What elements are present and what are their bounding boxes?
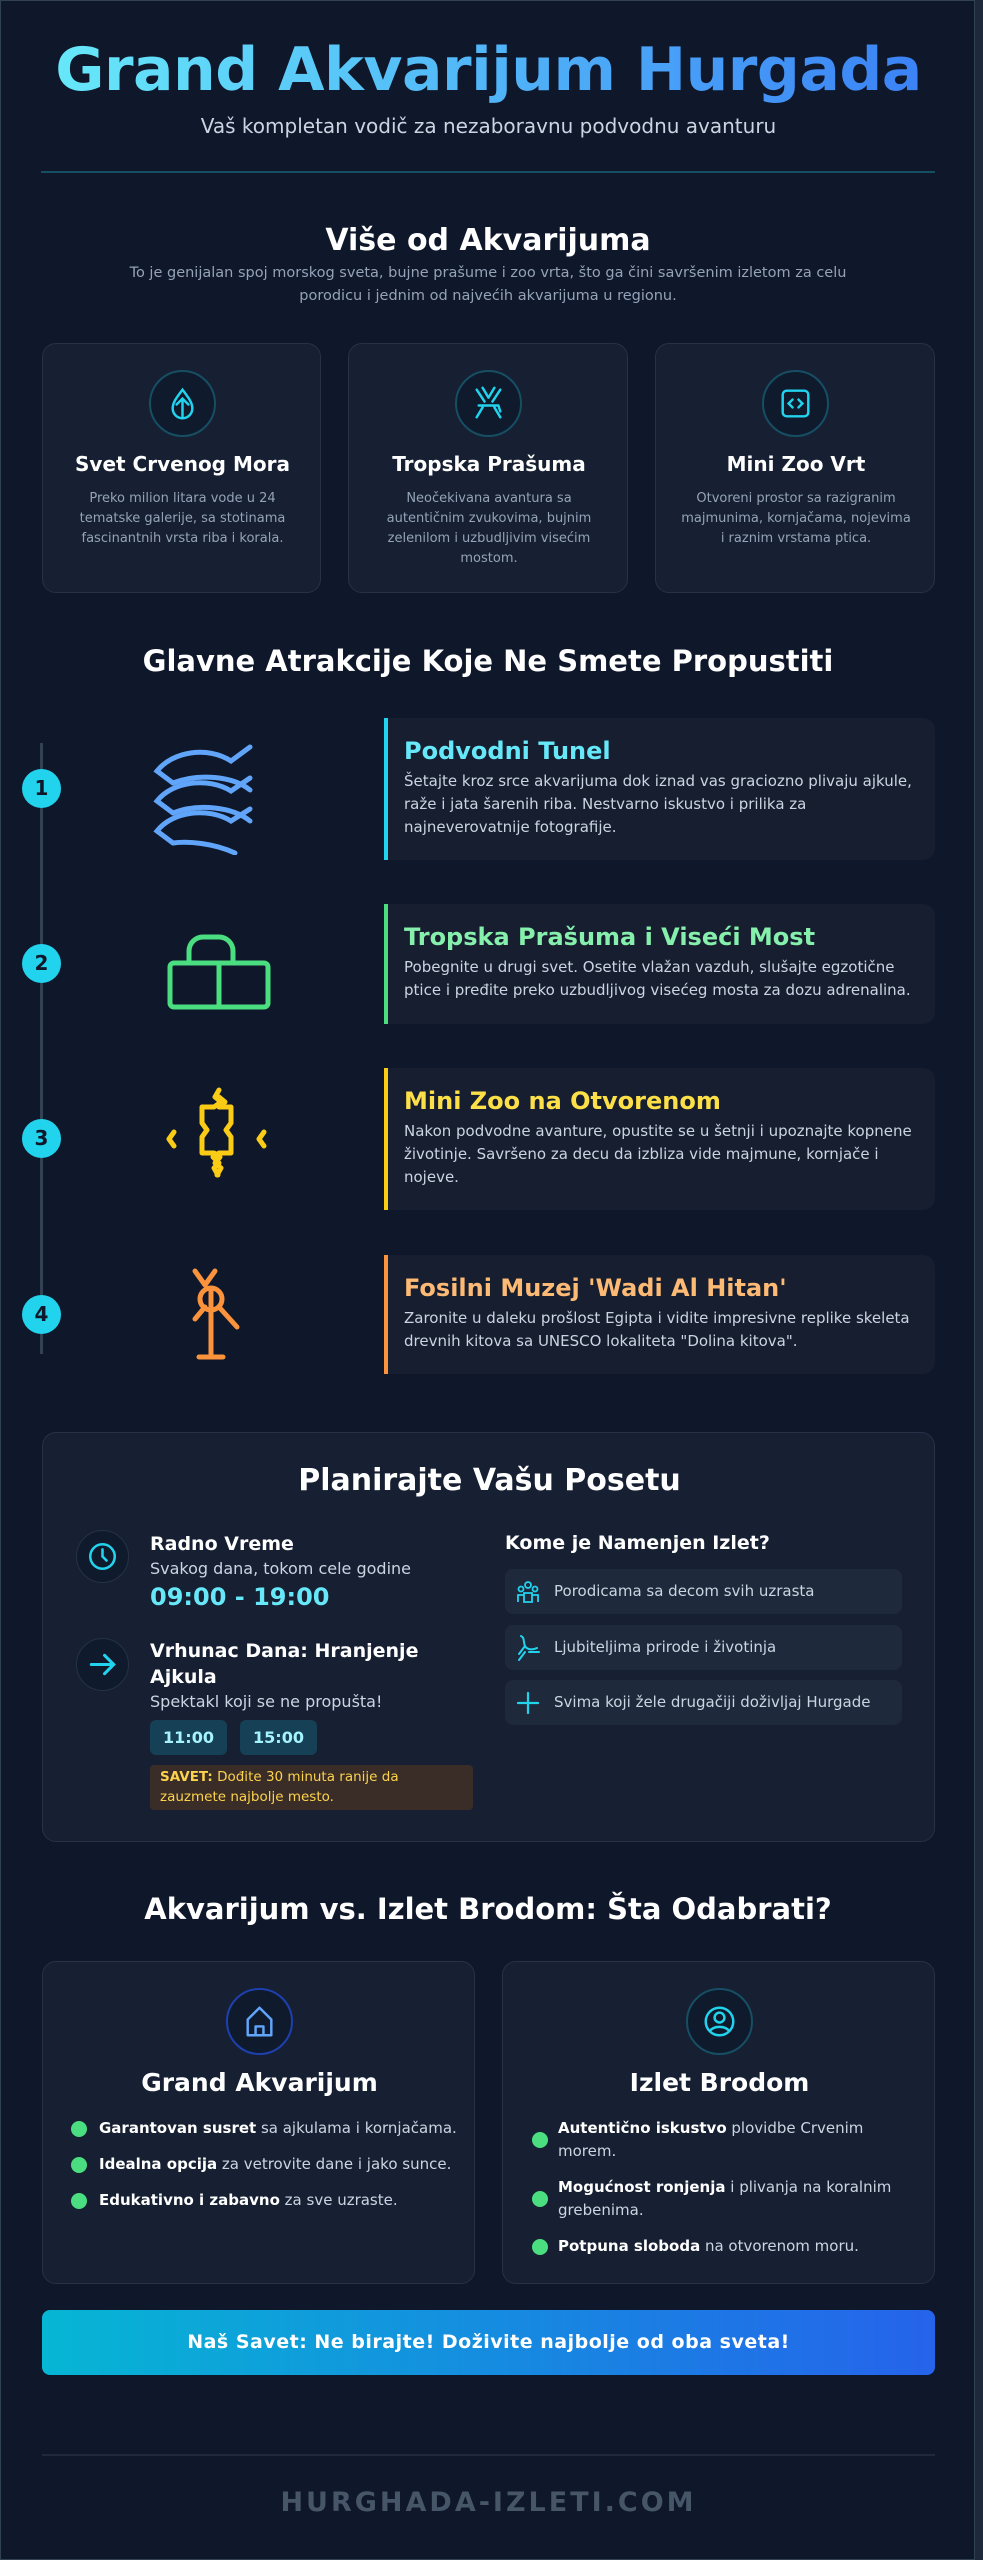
attraction 2: Pobegnite u drugi svet. Osetite vlažan vazduh, slušajte egzotične ptice i pređite preko uzbudljivog visećeg mosta za dozu adrenalina. [404,958,911,999]
panel: svet crvenog mora: Preko milion litara vode u 24 tematske galerije, sa stotinama fascinantnih vrsta riba i korala. [80,491,285,546]
audience item 1 [505,1569,902,1614]
heading: vs: Akvarijum vs. Izlet Brodom: Šta Odabrati? [144,1892,832,1926]
panel: tropska prasuma [348,343,628,593]
panel: grand akvarijum [42,1961,475,2284]
benefit list: Edukativno i zabavno za sve uzraste. [99,2191,398,2209]
panel: mini zoo vrt: Otvoreni prostor sa razigranim majmunima, kornjačama, nojevima i raznim vrstama ptica. [681,491,911,546]
attraction 4 [384,1255,935,1374]
icon: fossil [192,1268,240,1360]
icon: jungle [455,370,522,437]
panel: planirajte posetu: 15:00 [253,1728,304,1747]
number 1: 1 [35,776,48,800]
feeding: Vrhunac Dana: Hranjenje Ajkula [150,1640,418,1688]
attraction 3: Nakon podvodne avanture, opustite se u šetnji i upoznajte kopnene životinje. Savršeno za decu da izbliza vide majmune, kornjače i nojeve. [404,1122,912,1186]
working hours [150,1533,411,1611]
benefit list: Mogućnost ronjenja i plivanja na koralnim grebenima. [558,2178,891,2219]
audience item 2 [505,1625,902,1670]
tip box: SAVET: Dođite 30 minuta ranije da zauzmete najbolje mesto. [160,1769,399,1805]
icon: user [686,1988,753,2055]
panel: izlet brodom: Izlet Brodom [630,2068,809,2097]
feeding: Spektakl koji se ne propušta! [150,1692,382,1711]
number 1 [22,769,61,808]
attraction 3 [384,1068,935,1210]
callout banner [42,2310,935,2375]
panel: svet crvenog mora [42,343,321,593]
panel: planirajte posetu [42,1432,935,1842]
subtitle: Vaš kompletan vodič za nezaboravnu podvodnu avanturu [201,114,776,138]
icon: clock [76,1530,129,1583]
attraction 2 [384,904,935,1024]
attraction 2: Tropska Prašuma i Viseći Most [404,923,815,951]
icon: house [226,1988,293,2055]
benefit list: Garantovan susret sa ajkulama i kornjačama. [99,2119,457,2137]
audience item 3 [505,1680,902,1725]
number 4 [22,1295,61,1334]
tip box [150,1765,473,1810]
number 4: 4 [35,1302,48,1326]
number 3 [22,1119,61,1158]
heading: kome je namenjen: Kome je Namenjen Izlet? [505,1532,770,1554]
attraction 1: Podvodni Tunel [404,737,611,765]
attraction 4: Zaronite u daleku prošlost Egipta i vidite impresivne replike skeleta drevnih kitova sa UNESCO lokaliteta "Dolina kitova". [404,1309,910,1350]
panel: mini zoo vrt [655,343,935,593]
time chips [150,1720,227,1755]
icon: arrow [76,1638,129,1691]
heading: glavne atrakcije: Glavne Atrakcije Koje Ne Smete Propustiti [143,644,833,678]
benefit list [532,2119,891,2255]
attraction 1 [384,718,935,860]
audience item 3: Svima koji žele drugačiji doživljaj Hurgade [554,1693,870,1711]
intro text: To je genijalan spoj morskog sveta, bujne prašume i zoo vrta, što ga čini savršenim izletom za celu porodicu i jednim od najvećih akvarijuma u regionu. [130,265,846,304]
audience item 1: Porodicama sa decom svih uzrasta [554,1582,814,1600]
benefit list [71,2119,457,2209]
icon: drop [149,370,216,437]
number 3: 3 [35,1126,48,1150]
attraction 4: Fosilni Muzej 'Wadi Al Hitan' [404,1274,787,1302]
time chips: 11:00 [163,1728,214,1747]
panel: mini zoo vrt: Mini Zoo Vrt [727,452,865,476]
attraction 3: Mini Zoo na Otvorenom [404,1087,721,1115]
icon: code box [762,370,829,437]
icon: zoo [166,1088,266,1178]
footer: HURGHADA-IZLETI.COM [280,2487,697,2518]
panel: tropska prasuma: Tropska Prašuma [392,452,586,476]
number 2: 2 [35,951,48,975]
panel: tropska prasuma: Neočekivana avantura sa autentičnim zvukovima, bujnim zelenilom i uzbudljivim visećim mostom. [387,491,591,566]
icon: waves [154,744,252,855]
working hours: Radno Vreme [150,1533,294,1555]
benefit list: Autentično iskustvo plovidbe Crvenim morem. [558,2119,863,2160]
panel: svet crvenog mora: Svet Crvenog Mora [75,452,290,476]
title: Grand Akvarijum Hurgada [55,35,922,105]
panel: izlet brodom [502,1961,935,2284]
working hours: Svakog dana, tokom cele godine [150,1559,411,1578]
callout banner: Naš Savet: Ne birajte! Doživite najbolje od oba sveta! [187,2331,790,2353]
heading: vise od akvarijuma: Više od Akvarijuma [325,223,651,258]
panel: grand akvarijum: Grand Akvarijum [141,2068,378,2097]
feeding [150,1640,418,1711]
audience item 2: Ljubiteljima prirode i životinja [554,1638,776,1656]
working hours: 09:00 - 19:00 [150,1583,329,1611]
heading: Planirajte Vašu Posetu [298,1463,681,1498]
number 2 [22,944,61,983]
benefit list: Idealna opcija za vetrovite dane i jako sunce. [99,2155,451,2173]
benefit list: Potpuna sloboda na otvorenom moru. [558,2237,859,2255]
icon: bridge [168,934,270,1010]
attraction 1: Šetajte kroz srce akvarijuma dok iznad vas graciozno plivaju ajkule, raže i jata šarenih riba. Nestvarno iskustvo i prilika za najneverovatnije fotografije. [404,772,912,836]
